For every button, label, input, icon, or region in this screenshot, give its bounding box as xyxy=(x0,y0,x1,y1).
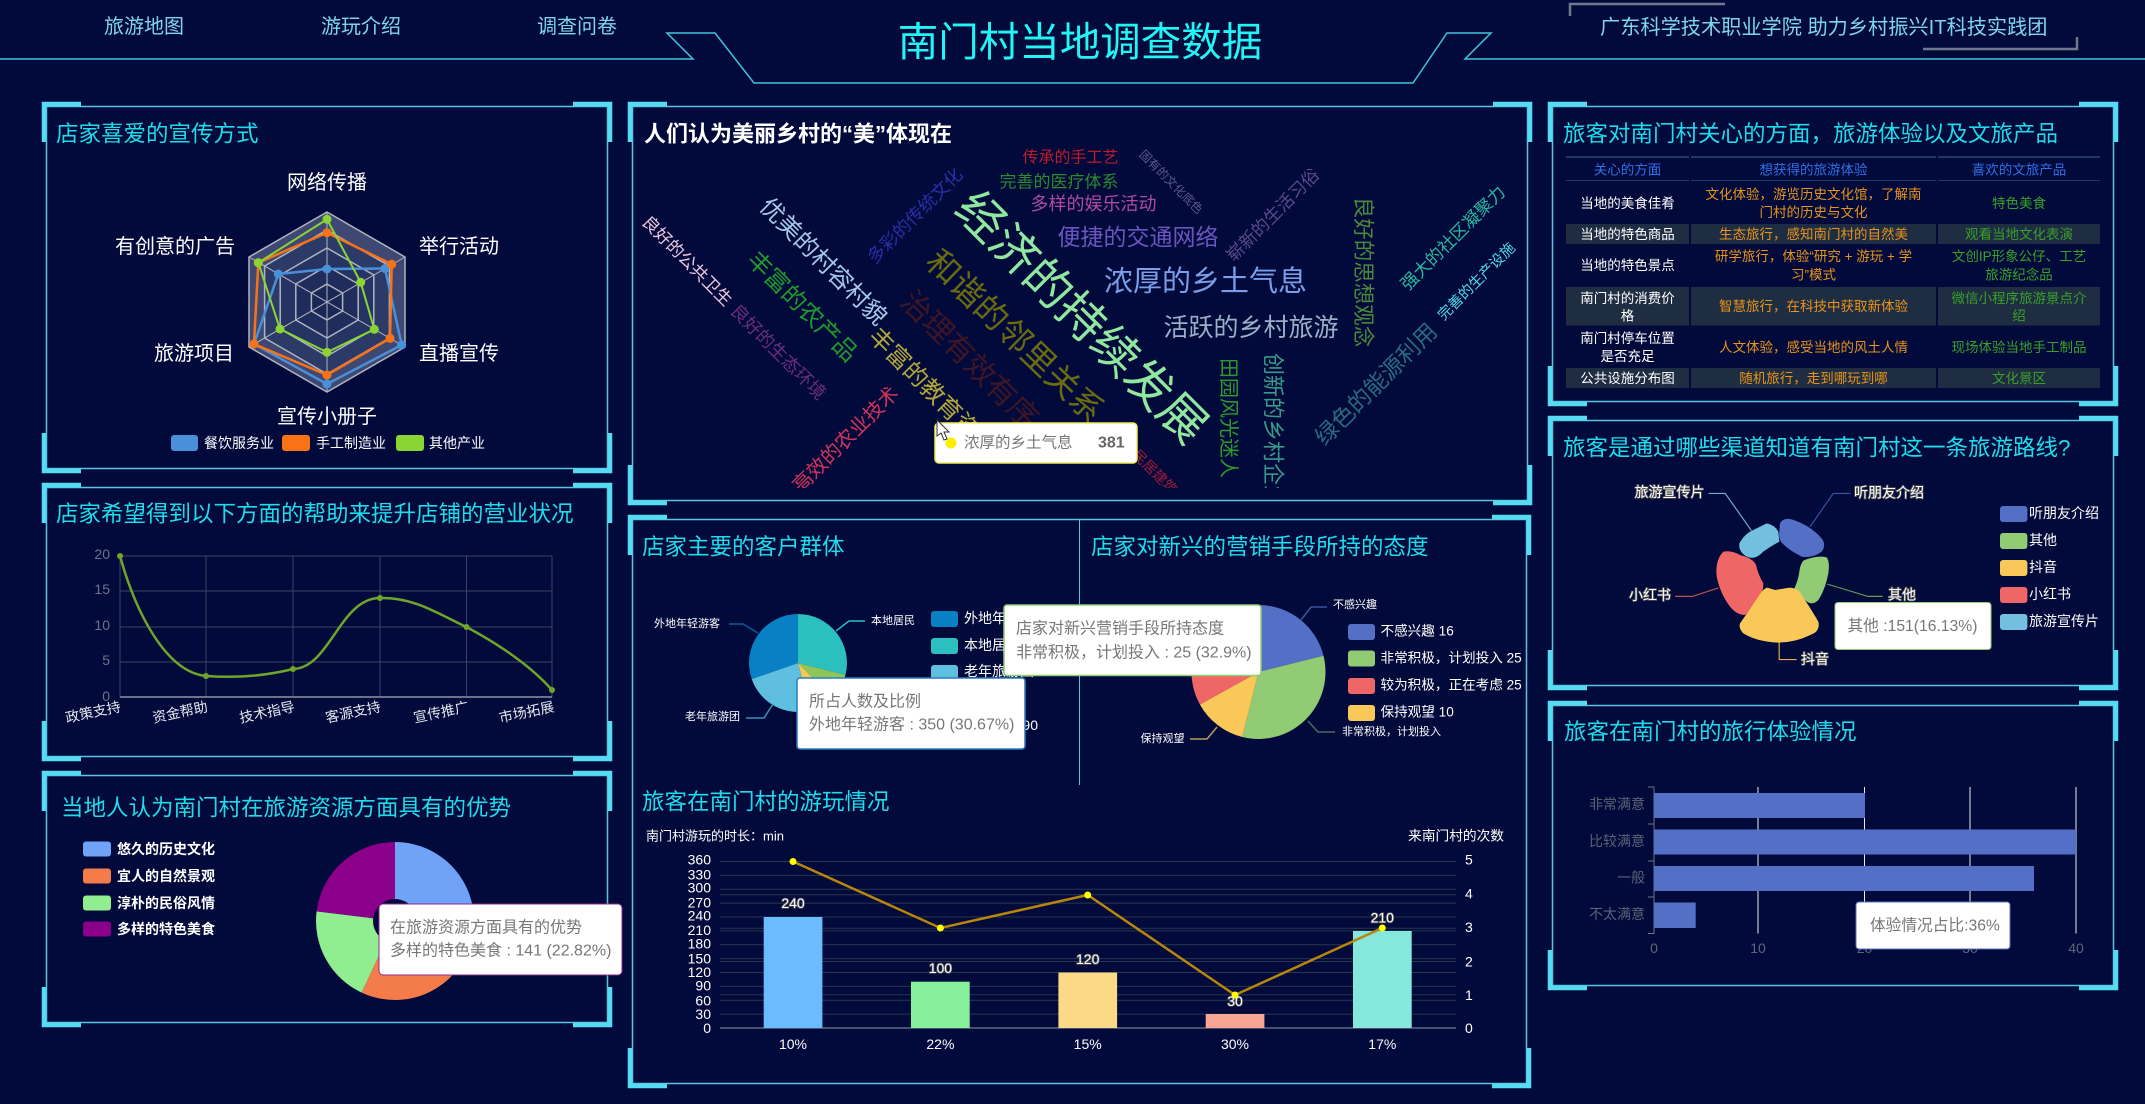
pie labels: marketing: 保持观望 xyxy=(1140,731,1184,745)
bar value labels: 30 xyxy=(1227,993,1243,1009)
table header xyxy=(1594,162,2066,178)
rose chart labels: 旅游宣传片 xyxy=(1634,484,1704,500)
tooltip: channels xyxy=(1835,602,1991,650)
left axis labels: 30 xyxy=(695,1006,711,1022)
word cloud: 高效的农业技术 xyxy=(788,382,903,497)
radar axis labels: 有创意的广告 xyxy=(115,235,235,258)
tooltip: marketing: 非常积极，计划投入 : 25 (32.9%) xyxy=(1016,644,1252,662)
word cloud: 丰富的教育资源 xyxy=(863,323,1001,461)
axis names: 来南门村的次数 xyxy=(1408,828,1504,844)
tooltip: experience: 体验情况占比:36% xyxy=(1870,916,2000,934)
right axis labels: 5 xyxy=(1465,852,1473,868)
line chart: 15 xyxy=(94,581,110,597)
table xyxy=(1566,157,2100,388)
left axis labels: 360 xyxy=(688,852,711,868)
tooltip: marketing: 店家对新兴营销手段所持态度 xyxy=(1016,620,1224,638)
left axis labels: 300 xyxy=(688,880,711,896)
word cloud: 田园风光迷人 xyxy=(1217,358,1240,478)
series: handicraft xyxy=(250,228,396,380)
legend: channels: 抖音 xyxy=(2029,559,2057,575)
tooltip: marketing xyxy=(1004,605,1261,676)
line series xyxy=(790,858,1386,998)
rose chart labels: 小红书 xyxy=(1629,587,1671,603)
rose chart labels: 抖音 xyxy=(1801,651,1829,667)
left axis labels: 180 xyxy=(688,936,711,952)
panel: business help line chart xyxy=(44,485,610,759)
table column: concerns xyxy=(1580,195,1675,386)
heading: help wanted: 店家希望得到以下方面的帮助来提升店铺的营业状况 xyxy=(56,502,574,526)
table column: products: 观看当地文化表演 xyxy=(1965,227,2073,242)
word cloud: 良好的生态环境 xyxy=(726,300,830,404)
navigation: survey: 调查问卷 xyxy=(537,15,617,38)
legend: advantages: 悠久的历史文化 xyxy=(117,841,215,857)
radar legend: 餐饮服务业 xyxy=(204,435,274,451)
tooltip: customers: 所占人数及比例 xyxy=(809,692,921,710)
word cloud xyxy=(638,147,1519,507)
table column: products: 现场体验当地手工制品 xyxy=(1952,340,2086,355)
word cloud: 经济的持续发展 xyxy=(945,182,1217,454)
word cloud: 完善的医疗体系 xyxy=(1000,172,1118,192)
panel: visitor interests table xyxy=(1550,104,2116,404)
horizontal bar chart: 0 xyxy=(1650,940,1658,956)
table column: products: 文化景区 xyxy=(1992,371,2046,386)
horizontal bar chart xyxy=(1589,787,2084,956)
x axis labels: 30% xyxy=(1221,1036,1249,1052)
series: catering xyxy=(250,264,406,388)
word cloud: 传承的手工艺 xyxy=(1022,148,1119,166)
table column: concerns: 当地的特色商品 xyxy=(1580,226,1675,242)
heading: customer groups: 店家主要的客户群体 xyxy=(642,534,845,560)
team name box: 广东科学技术职业学院 助力乡村振兴IT科技实践团 xyxy=(1600,16,2048,39)
left axis labels: 330 xyxy=(688,866,711,882)
line chart: 10 xyxy=(94,617,110,633)
horizontal bar chart: 10 xyxy=(1750,940,1766,956)
table column: concerns: 当地的美食佳肴 xyxy=(1580,195,1675,211)
legend: customers: 其他群体 90 xyxy=(963,717,1038,733)
heading: visitor interests: 旅客对南门村关心的方面，旅游体验以及文旅产品 xyxy=(1563,122,2058,146)
word cloud: 良好的公共卫生 xyxy=(638,212,736,310)
radar axis labels: 举行活动 xyxy=(419,235,499,258)
table column: products: 旅游纪念品 xyxy=(1985,266,2053,282)
pie labels: customers: 外地年轻游客 xyxy=(654,616,720,630)
panel: promotion radar xyxy=(44,104,610,471)
panel: word cloud xyxy=(630,104,1530,507)
left axis labels: 150 xyxy=(688,950,711,966)
pie labels: customers xyxy=(654,613,915,723)
legend: advantages: 宜人的自然景观 xyxy=(117,868,215,884)
word cloud: 完善的生产设施 xyxy=(1435,239,1519,324)
table column: experiences: 人文体验，感受当地的风土人情 xyxy=(1719,339,1908,355)
legend: customers: 外地年轻游客 350 xyxy=(964,610,1075,626)
radar axis labels: 旅游项目 xyxy=(154,342,234,365)
table rows background xyxy=(1566,224,2100,388)
table column: concerns: 当地的特色景点 xyxy=(1580,257,1675,273)
bar value labels xyxy=(781,895,1394,1009)
donut chart: advantages xyxy=(316,842,474,1000)
right axis labels: 4 xyxy=(1465,886,1473,902)
word cloud: 丰富的农产品 xyxy=(742,247,862,367)
line chart: 20 xyxy=(94,546,110,562)
radar legend: 手工制造业 xyxy=(316,435,386,451)
radar axis labels: 网络传播 xyxy=(287,171,367,194)
pie chart: customers xyxy=(654,613,915,723)
tooltip: experience xyxy=(1856,902,2010,949)
legend: marketing: 非常积极，计划投入 25 xyxy=(1380,650,1522,666)
radar legend: 其他产业 xyxy=(429,435,485,451)
bar value labels: 100 xyxy=(929,960,952,976)
x axis labels xyxy=(779,1036,1396,1052)
table column: experiences: 随机旅行，走到哪玩到哪 xyxy=(1739,371,1888,386)
word cloud: 绿色的能源利用 xyxy=(1310,318,1442,450)
pie labels: marketing xyxy=(1140,597,1441,745)
legend: customers: 老年旅游团 300 xyxy=(964,663,1061,679)
word cloud: 崭新的生活习俗 xyxy=(1223,165,1323,265)
icon: mouse cursor xyxy=(937,420,949,440)
rose chart labels: 其他 xyxy=(1888,586,1916,602)
panel: tourism resource advantages xyxy=(44,773,622,1025)
table column: experiences: 门村的历史与文化 xyxy=(1760,205,1868,220)
radar legend xyxy=(171,435,485,451)
heading: marketing attitudes: 店家对新兴的营销手段所持的态度 xyxy=(1091,534,1429,560)
combo chart: visit duration and frequency xyxy=(646,828,1504,1052)
legend: marketing: 较为积极，正在考虑 25 xyxy=(1380,678,1522,692)
table column: experiences xyxy=(1706,187,1922,386)
left axis labels: 270 xyxy=(688,894,711,910)
table column: concerns: 格 xyxy=(1621,308,1635,324)
table column: products: 特色美食 xyxy=(1992,195,2046,211)
rose chart: channels xyxy=(1629,484,1924,667)
table column: concerns: 是否充足 xyxy=(1600,349,1655,364)
table column: concerns: 南门村的消费价 xyxy=(1580,291,1675,306)
bars xyxy=(764,917,1412,1028)
left axis labels xyxy=(688,852,711,1036)
legend: channels: 听朋友介绍 xyxy=(2029,505,2099,521)
tooltip: word cloud: 381 xyxy=(1098,434,1125,452)
table header: 喜欢的文旅产品 xyxy=(1972,162,2066,178)
legend: advantages xyxy=(83,841,215,937)
left axis labels: 210 xyxy=(688,922,711,938)
tooltip: word cloud xyxy=(935,423,1137,463)
axis names xyxy=(646,828,1504,844)
horizontal bar chart: 比较满意 xyxy=(1589,833,1645,849)
legend: advantages: 多样的特色美食 xyxy=(117,921,215,937)
line chart: 0 xyxy=(102,688,110,704)
bar value labels: 240 xyxy=(781,895,805,911)
table column: experiences: 习”模式 xyxy=(1791,268,1836,282)
table column: experiences: 生态旅行，感知南门村的自然美 xyxy=(1719,226,1908,242)
x axis labels: 17% xyxy=(1368,1036,1396,1052)
horizontal bar chart: 40 xyxy=(2068,940,2084,956)
pie labels: marketing: 非常积极，计划投入 xyxy=(1342,724,1441,738)
x axis labels: 15% xyxy=(1074,1036,1102,1052)
x axis labels: 10% xyxy=(779,1036,807,1052)
tooltip: advantages: 在旅游资源方面具有的优势 xyxy=(390,918,582,936)
word cloud: 治理有效有序 xyxy=(894,285,1044,435)
tooltip: advantages: 多样的特色美食 : 141 (22.82%) xyxy=(390,942,611,960)
word cloud: 便捷的交通网络 xyxy=(1058,224,1218,250)
pie labels: customers: 本地居民 xyxy=(871,613,915,627)
panel: travel experience xyxy=(1550,703,2116,988)
bar value labels: 210 xyxy=(1371,910,1394,926)
horizontal bar chart: 30 xyxy=(1962,940,1978,956)
word cloud: 强大的社区凝聚力 xyxy=(1397,182,1509,294)
header xyxy=(0,4,2145,83)
heading: visit stats: 旅客在南门村的游玩情况 xyxy=(642,790,890,814)
table column: experiences: 研学旅行，体验“研究 + 游玩 + 学 xyxy=(1715,249,1912,264)
table column: concerns: 公共设施分布图 xyxy=(1580,371,1675,386)
tooltip: channels: 其他 :151(16.13%) xyxy=(1848,617,1977,635)
table header: 关心的方面 xyxy=(1594,162,1661,178)
line chart: 资金帮助 xyxy=(151,698,209,726)
series: other industries xyxy=(254,215,379,357)
word cloud: 和谐的邻里关系 xyxy=(919,242,1111,430)
word cloud: 固有的文化底色 xyxy=(1136,147,1206,217)
radar chart xyxy=(115,171,499,451)
panel: customers, marketing, visit stats xyxy=(630,517,1529,1086)
rose chart labels xyxy=(1629,484,1924,667)
x axis labels: 22% xyxy=(926,1036,954,1052)
title: 南门村当地调查数据 xyxy=(898,19,1262,65)
line chart: 客源支持 xyxy=(324,698,382,726)
table column: concerns: 南门村停车位置 xyxy=(1580,330,1675,346)
heading: promotion methods: 店家喜爱的宣传方式 xyxy=(56,122,259,146)
pie labels: customers: 老年旅游团 xyxy=(685,709,740,723)
line chart xyxy=(64,546,556,726)
table column: products: 微信小程序旅游景点介 xyxy=(1952,291,2087,306)
tooltip: word cloud: 浓厚的乡土气息 xyxy=(964,434,1073,452)
radar axis labels xyxy=(115,171,499,428)
right axis labels: 0 xyxy=(1465,1020,1473,1036)
legend: customers xyxy=(931,610,1075,734)
team name box xyxy=(1570,4,2077,49)
left axis labels: 60 xyxy=(695,992,711,1008)
tooltip: advantages xyxy=(379,904,622,975)
horizontal bar chart: 非常满意 xyxy=(1589,796,1645,812)
tooltip: customers: 外地年轻游客 : 350 (30.67%) xyxy=(809,716,1014,734)
word cloud: 民居建筑 xyxy=(1130,447,1180,497)
word cloud: 多彩的传统文化 xyxy=(863,164,967,268)
navigation: tourist map: 旅游地图 xyxy=(104,15,184,38)
heading: channels: 旅客是通过哪些渠道知道有南门村这一条旅游路线? xyxy=(1563,436,2071,460)
left axis labels: 240 xyxy=(688,908,711,924)
radar axis labels: 直播宣传 xyxy=(419,342,499,365)
axis names: 南门村游玩的时长：min xyxy=(646,828,784,844)
table column: experiences: 文化体验，游览历史文化馆，了解南 xyxy=(1706,187,1922,202)
tooltip: customers xyxy=(797,678,1025,749)
bar value labels: 120 xyxy=(1076,951,1100,967)
table column: experiences: 智慧旅行，在科技中获取新体验 xyxy=(1719,299,1908,314)
right axis labels: 3 xyxy=(1465,919,1473,935)
panel: information channels xyxy=(1550,418,2116,688)
legend: channels xyxy=(2000,505,2099,630)
line chart: 5 xyxy=(102,652,110,668)
word cloud: 活跃的乡村旅游 xyxy=(1163,314,1339,342)
legend: advantages: 淳朴的民俗风情 xyxy=(117,895,215,911)
navigation: tour intro: 游玩介绍 xyxy=(321,15,401,38)
legend: channels: 旅游宣传片 xyxy=(2029,613,2099,629)
table column: products: 文创IP形象公仔、工艺 xyxy=(1952,249,2086,264)
legend: channels: 小红书 xyxy=(2029,586,2071,602)
legend: marketing xyxy=(1348,622,1522,721)
line chart: 政策支持 xyxy=(64,698,122,726)
heading: beauty of villages: 人们认为美丽乡村的“美”体现在 xyxy=(644,122,952,146)
rose chart labels: 听朋友介绍 xyxy=(1854,484,1924,500)
word cloud: 良好的思想观念 xyxy=(1351,197,1375,347)
heading: advantages: 当地人认为南门村在旅游资源方面具有的优势 xyxy=(61,796,511,820)
header frame line xyxy=(0,33,2145,83)
word cloud: 优美的村容村貌 xyxy=(754,193,892,331)
horizontal bar chart: 一般 xyxy=(1617,870,1645,886)
heading: experience: 旅客在南门村的旅行体验情况 xyxy=(1564,720,1857,744)
line chart: 宣传推广 xyxy=(412,698,470,726)
word cloud: 创新的乡村企业 xyxy=(1260,353,1286,507)
pie labels: marketing: 不感兴趣 xyxy=(1333,597,1377,611)
word cloud: 多样的娱乐活动 xyxy=(1030,194,1156,214)
right axis labels: 1 xyxy=(1465,987,1473,1003)
legend: customers: 本地居民 320 xyxy=(964,637,1047,653)
left axis labels: 0 xyxy=(703,1020,711,1036)
table column: products: 绍 xyxy=(2012,308,2026,324)
right axis labels: 2 xyxy=(1465,954,1473,970)
right axis labels xyxy=(1465,852,1473,1036)
radar axis labels: 宣传小册子 xyxy=(277,405,377,428)
left axis labels: 120 xyxy=(688,964,711,980)
pie chart: marketing xyxy=(1140,597,1441,745)
left axis labels: 90 xyxy=(695,978,711,994)
horizontal bar chart: 20 xyxy=(1857,940,1872,956)
legend: channels: 其他 xyxy=(2029,532,2057,548)
word cloud: 浓厚的乡土气息 xyxy=(1104,265,1307,298)
legend: marketing: 不感兴趣 16 xyxy=(1380,622,1454,638)
line chart: 市场拓展 xyxy=(497,698,556,726)
line chart: 技术指导 xyxy=(238,698,296,726)
horizontal bar chart: 不太满意 xyxy=(1589,906,1645,922)
legend: marketing: 保持观望 10 xyxy=(1380,704,1454,720)
table column: products xyxy=(1952,195,2087,386)
table header: 想获得的旅游体验 xyxy=(1760,162,1868,178)
